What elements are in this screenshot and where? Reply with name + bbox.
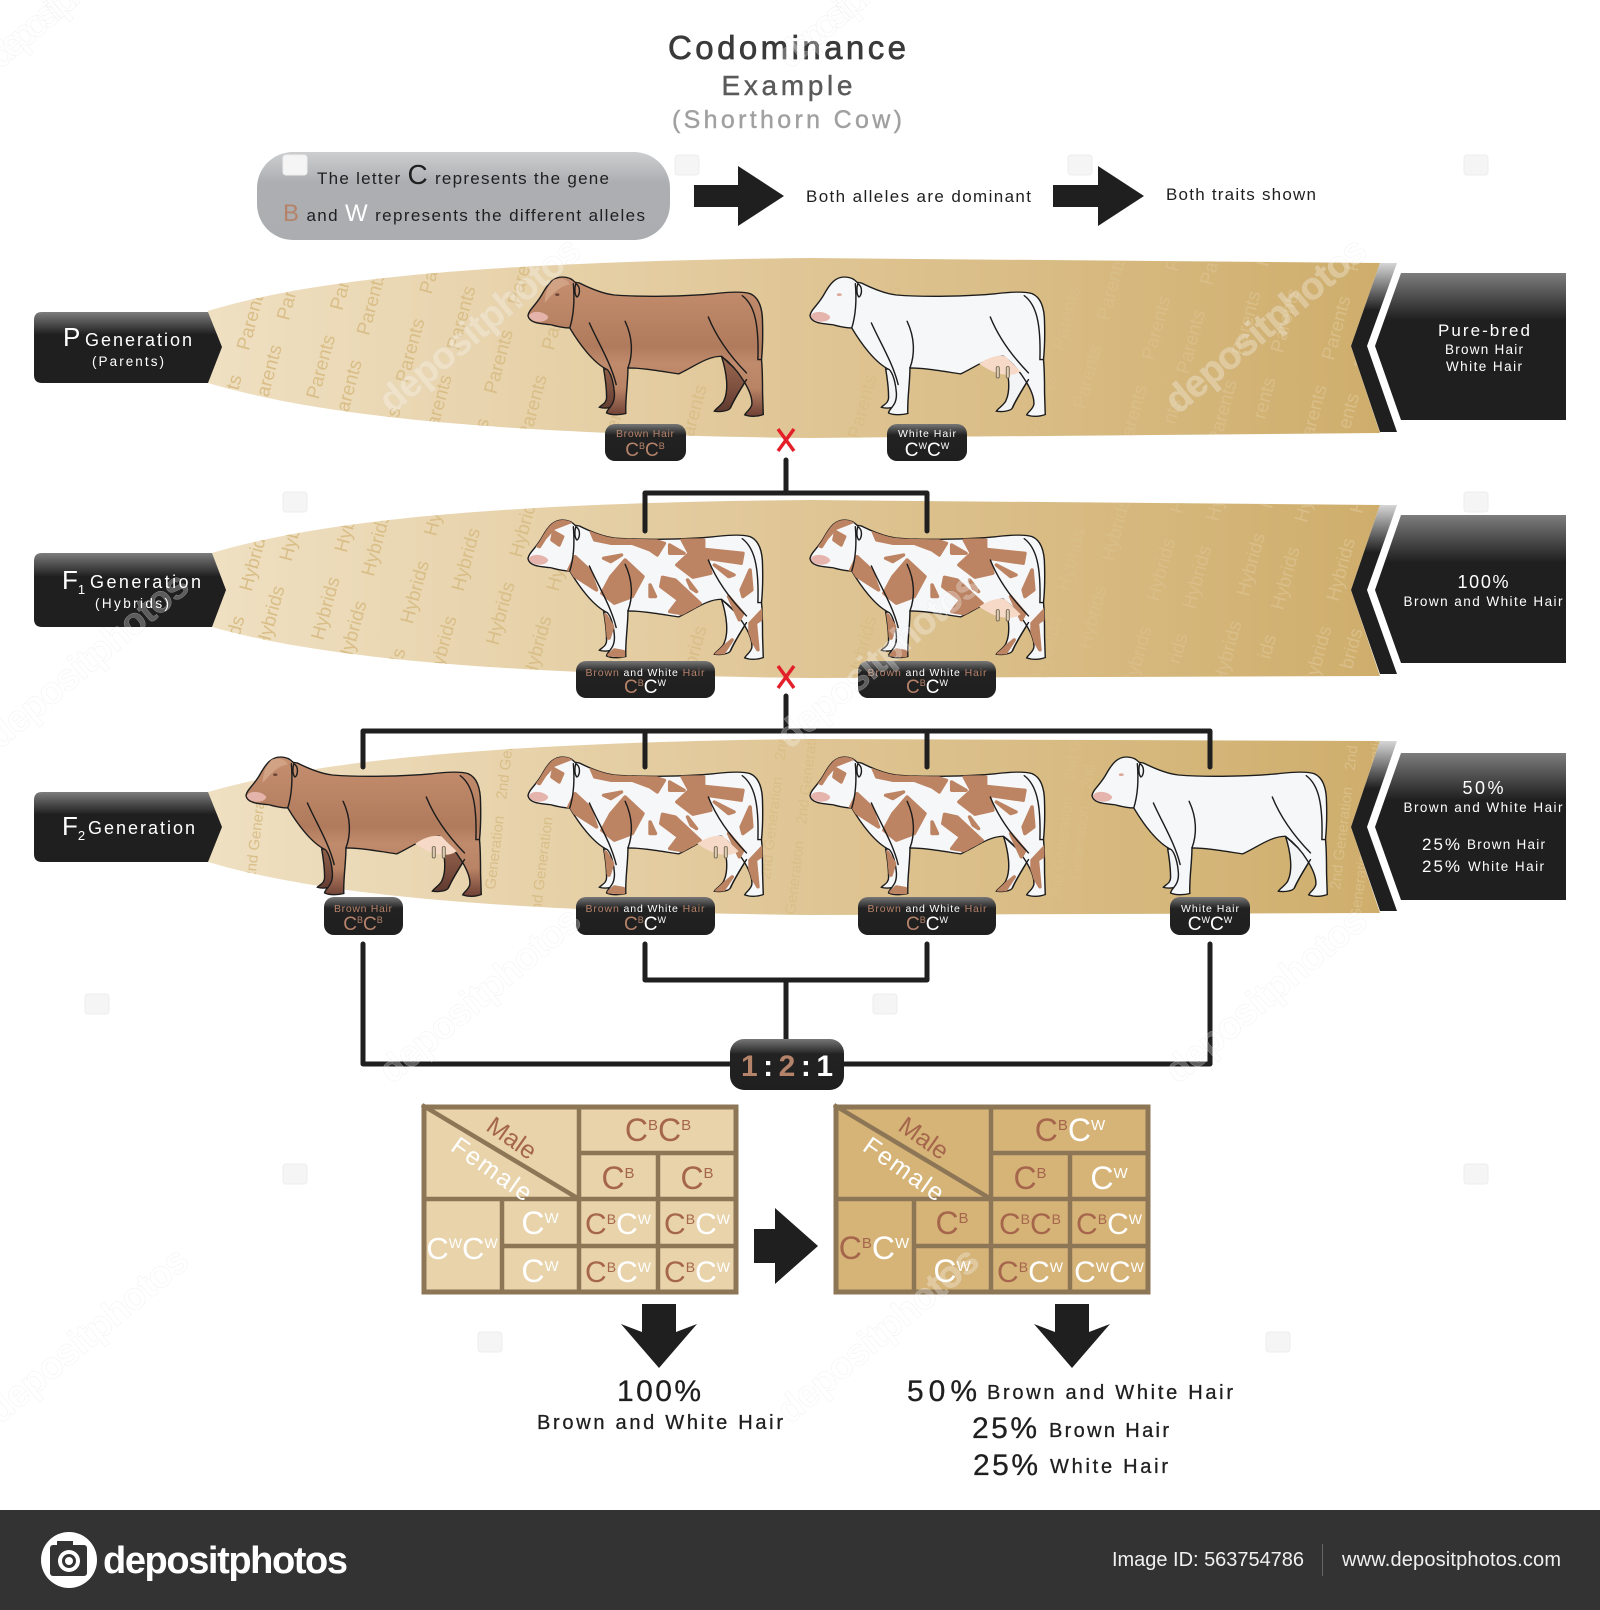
punnett square: F1 cross: B bbox=[648, 1117, 658, 1134]
panel: F1 generation band: Hybrids Hybrids Hybrids bbox=[213, 438, 296, 681]
chip: F2 white bbox=[1170, 897, 1250, 935]
panel: F2 generation band: Generation 2nd bbox=[1067, 763, 1098, 880]
punnett square: F2 cross: W bbox=[895, 1235, 910, 1252]
panel: F1 generation band: brids Hybrids Hybrids bbox=[1337, 451, 1414, 671]
title bbox=[668, 29, 906, 134]
punnett square: F1 cross: C bbox=[585, 1208, 607, 1241]
chip: P brown hair: B bbox=[659, 441, 665, 451]
result: F1 cross bbox=[537, 1375, 783, 1434]
label: F1 generation: (Hybrids) bbox=[95, 596, 169, 611]
label: P generation: Generation bbox=[85, 330, 192, 350]
footer bar: www.depositphotos.com bbox=[1341, 1549, 1561, 1571]
punnett square: F2 cross: C bbox=[1090, 1160, 1113, 1196]
cow: P brown bbox=[528, 277, 763, 416]
chip: P brown hair: C bbox=[625, 440, 639, 461]
panel: P generation band: Parents Parents bbox=[845, 284, 906, 441]
punnett square: F2 cross: C bbox=[1109, 1256, 1131, 1289]
panel: F2 generation band: Generation 2nd Generation bbox=[482, 696, 523, 890]
watermarks: depositphotos bbox=[1157, 229, 1375, 422]
title: Example bbox=[722, 70, 852, 101]
punnett square: F2 cross: B bbox=[862, 1235, 872, 1252]
panel: P generation band: rents Parents Parents bbox=[1250, 198, 1328, 421]
watermarks: depositphotos bbox=[1157, 899, 1375, 1092]
panel: F2 generation band bbox=[208, 739, 1380, 915]
label: F2 generation bbox=[34, 792, 222, 862]
punnett square: F1 cross: W bbox=[449, 1235, 463, 1251]
label: F1 generation bbox=[34, 553, 226, 627]
panel: P generation band: ents Parents Parents bbox=[465, 239, 542, 456]
punnett square: F2 cross: W bbox=[1131, 1259, 1145, 1275]
footer bar: Image ID: 563754786 bbox=[1112, 1549, 1304, 1571]
punnett square: F2 cross: B bbox=[1019, 1259, 1028, 1275]
result: F1 cross: 100% bbox=[617, 1375, 701, 1408]
chip: F2 hybrid left: C bbox=[624, 914, 638, 935]
punnett square: F2 cross: W bbox=[1096, 1259, 1110, 1275]
title: (Shorthorn Cow) bbox=[672, 106, 902, 134]
punnett square: F2 cross: C bbox=[1076, 1208, 1098, 1241]
chevron: F1 bbox=[1351, 505, 1397, 674]
punnett square: F2 cross: C bbox=[997, 1256, 1019, 1289]
punnett square: F1 cross: W bbox=[544, 1258, 559, 1275]
punnett square: F2 cross: C bbox=[999, 1208, 1021, 1241]
chevron: P bbox=[1351, 263, 1397, 432]
chip: P white hair: W bbox=[918, 441, 928, 451]
cow: F2 white bbox=[1092, 757, 1327, 896]
label: F2 generation: Generation bbox=[88, 818, 195, 838]
punnett square: F1 cross: C bbox=[601, 1160, 625, 1196]
punnett square: F2 cross: B bbox=[959, 1210, 969, 1227]
cross: P bbox=[778, 429, 794, 451]
punnett square: F2 cross: W bbox=[1129, 1211, 1143, 1227]
panel: F1 generation band: Hybrids Hybrids Hybrids bbox=[253, 408, 336, 651]
panel: F1 generation band: Hybrids Hybrids Hybrids bbox=[520, 438, 603, 681]
punnett square: F2 cross: B bbox=[1058, 1117, 1068, 1134]
panel: F2 generation band: 2nd Generation 2nd bbox=[527, 774, 562, 920]
punnett square: F2 cross: C bbox=[872, 1230, 895, 1266]
punnett square: F1 cross: C bbox=[695, 1208, 717, 1241]
punnett square: F2 cross bbox=[834, 1105, 1150, 1294]
result: F2 cross bbox=[907, 1375, 1233, 1482]
panel: P generation band: ents Parents Parents bbox=[1335, 214, 1412, 431]
punnett square: F1 cross: W bbox=[638, 1211, 652, 1227]
chip: P white hair: W bbox=[941, 441, 950, 451]
chip: F2 hybrid left bbox=[576, 897, 715, 935]
chip: F2 brown bbox=[324, 897, 403, 935]
panel: P generation band: nts Parents Parents bbox=[1160, 219, 1234, 426]
chip: F2 white: W bbox=[1224, 915, 1233, 925]
punnett square: F2 cross: W bbox=[1113, 1165, 1128, 1182]
punnett square: F1 cross: W bbox=[484, 1235, 498, 1251]
panel: F1 generation band: Hybrids Hybrids bbox=[845, 526, 905, 681]
chevron: F2 bbox=[1351, 741, 1397, 911]
pill: gene and allele key bbox=[257, 152, 670, 240]
label: F2 generation: F bbox=[62, 811, 78, 841]
punnett square: F2 cross: C bbox=[933, 1253, 956, 1289]
panel: F2 generation band: 2nd Generation 2nd Generation bbox=[1047, 677, 1091, 900]
chip: F2 hybrid right: C bbox=[906, 914, 920, 935]
chip: F1 right: B bbox=[920, 678, 926, 688]
punnett square: F1 cross bbox=[422, 1105, 738, 1294]
chip: P brown hair bbox=[605, 424, 686, 461]
chip: P brown hair: B bbox=[639, 441, 645, 451]
arrow: to both traits shown bbox=[1053, 166, 1144, 226]
watermarks: depositphotos bbox=[769, 1239, 987, 1432]
punnett square: F2 cross: W bbox=[956, 1258, 971, 1275]
chip: F1 right: C bbox=[926, 677, 939, 698]
punnett square: F2 cross: B bbox=[1021, 1211, 1030, 1227]
panel: P generation band: Parents Parents Parents bbox=[330, 180, 414, 426]
punnett square: F2 cross: W bbox=[1091, 1117, 1106, 1134]
chip: P brown hair: C bbox=[645, 440, 659, 461]
label: F1 generation: F bbox=[62, 565, 78, 595]
title: Codominance bbox=[668, 29, 906, 66]
punnett square: F1 cross: B bbox=[681, 1117, 691, 1134]
panel: F2 result: 25% bbox=[1422, 857, 1460, 876]
punnett square: F2 cross: C bbox=[1013, 1160, 1037, 1196]
punnett square: F2 cross: C bbox=[1068, 1112, 1091, 1148]
panel: F2 generation band: Generation 2nd Generation bbox=[782, 721, 823, 915]
punnett square: F1 cross: C bbox=[664, 1256, 686, 1289]
arrow: down right bbox=[1034, 1304, 1110, 1368]
label: F1 generation: 1 bbox=[78, 582, 85, 597]
panel: pure-bred result bbox=[1375, 273, 1566, 420]
result: F2 cross: White Hair bbox=[1050, 1456, 1168, 1478]
panel: F1 generation band: Hybrids Hybrids Hybrids bbox=[1120, 448, 1203, 691]
panel: F1 generation band: Hybrids Hybrids bbox=[675, 536, 735, 691]
cow: P white bbox=[810, 277, 1045, 416]
chip: F2 hybrid left: C bbox=[644, 914, 657, 935]
watermarks: depositphotos bbox=[371, 899, 589, 1092]
panel: F1 generation band: Hybrids Hybrids Hybrids bbox=[1210, 443, 1293, 686]
panel: P generation band: Parents Parents Parents bbox=[210, 195, 294, 441]
punnett square: F1 cross: C bbox=[695, 1256, 717, 1289]
chip: F2 hybrid right: C bbox=[926, 914, 939, 935]
chip: P white hair: White Hair bbox=[898, 428, 956, 440]
watermarks: depositphotos bbox=[769, 564, 987, 757]
chip: F1 right bbox=[858, 661, 996, 698]
footer bar: depositphotos bbox=[103, 1540, 348, 1582]
punnett square: F1 cross: Male bbox=[481, 1111, 542, 1165]
panel: F1 generation band bbox=[212, 500, 1380, 678]
icon: depositphotos camera bbox=[41, 1532, 97, 1588]
result: F2 cross: Brown and White Hair bbox=[987, 1382, 1233, 1404]
cow: F1 left bbox=[528, 520, 763, 659]
ratio badge: 1 : 2 : 1 bbox=[741, 1050, 833, 1083]
connectors: F1 to F2 bbox=[363, 696, 1210, 767]
punnett square: F1 cross: C bbox=[462, 1231, 484, 1266]
cow: F2 spotted left bbox=[528, 757, 763, 896]
panel: F2 generation band: 2nd Generation 2nd Generation bbox=[242, 657, 286, 880]
label: F1 generation: Generation bbox=[90, 572, 201, 592]
panel: F2 generation band: Generation 2nd Generation bbox=[1347, 726, 1388, 920]
watermarks bbox=[0, 0, 1375, 1432]
punnett square: F2 cross: C bbox=[839, 1230, 862, 1266]
punnett square: F2 cross: C bbox=[1074, 1256, 1096, 1289]
label: P generation: (Parents) bbox=[92, 354, 164, 369]
punnett square: F2 cross: C bbox=[1028, 1256, 1050, 1289]
punnett square: F1 cross: B bbox=[704, 1165, 714, 1182]
panel: F1 result: Brown and White Hair bbox=[1404, 594, 1563, 609]
chip: F2 white: White Hair bbox=[1181, 903, 1240, 915]
chip: F2 brown: B bbox=[357, 915, 363, 925]
result: F2 cross: 25% bbox=[973, 1449, 1038, 1482]
panel: P generation band: rents Parents Parents bbox=[375, 228, 453, 451]
panel: pure-bred result: Brown Hair bbox=[1445, 342, 1524, 357]
panel: P generation band: Parents Parents Parents bbox=[1295, 205, 1379, 451]
result: F2 cross: Brown Hair bbox=[1049, 1420, 1169, 1442]
panel: F2 result: Brown and White Hair bbox=[1404, 800, 1563, 815]
punnett square: F1 cross: B bbox=[625, 1165, 635, 1182]
chip: F2 white: W bbox=[1202, 915, 1210, 925]
panel: F2 result: White Hair bbox=[1468, 859, 1544, 874]
punnett square: F1 cross: B bbox=[686, 1211, 695, 1227]
result: F1 cross: Brown and White Hair bbox=[537, 1412, 783, 1434]
chip: F2 white: C bbox=[1188, 914, 1202, 935]
chip: F1 right: W bbox=[939, 678, 948, 688]
punnett square: F2 cross: C bbox=[935, 1205, 959, 1241]
chip: F1 left: C bbox=[644, 677, 657, 698]
chip: F2 brown: C bbox=[363, 914, 377, 935]
panel: F1 generation band: Hybrids Hybrids Hybrids bbox=[1300, 448, 1383, 691]
panel: P generation band: Parents Parents bbox=[675, 294, 736, 451]
punnett square: F1 cross: Female bbox=[446, 1132, 537, 1207]
camera watermarks bbox=[85, 155, 1488, 1352]
panel: F2 generation band: 2nd Generation 2nd bbox=[1327, 744, 1362, 890]
panel: P generation band: Parents Parents bbox=[595, 304, 656, 461]
punnett square: F1 cross: C bbox=[521, 1253, 544, 1289]
punnett square: F1 cross: W bbox=[638, 1259, 652, 1275]
arrow: between squares bbox=[754, 1208, 818, 1284]
connectors: P to F1 bbox=[645, 460, 927, 531]
chip: P brown hair: Brown Hair bbox=[616, 428, 674, 440]
punnett square: F2 cross: W bbox=[1050, 1259, 1064, 1275]
punnett square: F1 cross: W bbox=[717, 1259, 731, 1275]
panel: P generation band: nts Parents Parents bbox=[290, 244, 364, 451]
pill: gene and allele key: The letter C represents the gene bbox=[317, 159, 609, 190]
punnett square: F1 cross: C bbox=[625, 1112, 648, 1148]
chip: P white hair: C bbox=[927, 440, 941, 461]
panel: P generation band: Parents Parents Parents bbox=[515, 195, 599, 441]
chip: F1 left: B bbox=[638, 678, 644, 688]
text: both alleles dominant: Both alleles are dominant bbox=[806, 187, 1031, 206]
chip: P white hair: C bbox=[905, 440, 918, 461]
punnett square: F2 cross: B bbox=[1098, 1211, 1107, 1227]
panel: F1 generation band: Hybrids Hybrids bbox=[595, 546, 655, 701]
punnett square: F1 cross: C bbox=[664, 1208, 686, 1241]
chip: F1 right: C bbox=[906, 677, 920, 698]
arrow: to both alleles dominant bbox=[694, 166, 784, 226]
panel: P generation band: Parents Parents Parents bbox=[420, 195, 504, 441]
chip: F2 hybrid left: Brown and White Hair bbox=[586, 903, 705, 915]
punnett square: F1 cross: C bbox=[426, 1231, 449, 1266]
chip: F1 left: Brown and White Hair bbox=[586, 667, 705, 679]
punnett square: F1 cross: B bbox=[607, 1211, 616, 1227]
watermarks: depositphotos bbox=[371, 229, 589, 422]
label: P generation: P bbox=[63, 322, 80, 352]
chip: F2 hybrid right: W bbox=[939, 915, 948, 925]
punnett square: F1 cross: C bbox=[585, 1256, 607, 1289]
arrow: down left bbox=[621, 1304, 697, 1368]
chip: F2 white: C bbox=[1210, 914, 1224, 935]
punnett square: F2 cross: C bbox=[1107, 1208, 1129, 1241]
cow: F1 right bbox=[810, 520, 1045, 659]
chip: F2 hybrid right bbox=[858, 897, 996, 935]
punnett square: F1 cross: C bbox=[616, 1208, 638, 1241]
panel: F2 result bbox=[1375, 753, 1566, 900]
result: F2 cross: 25% bbox=[972, 1412, 1037, 1445]
panel: F1 generation band: rids Hybrids Hybrids bbox=[1165, 456, 1240, 666]
panel: F1 result: 100% bbox=[1458, 572, 1508, 592]
panel: F1 generation band: ids Hybrids Hybrids bbox=[470, 492, 543, 696]
chip: F2 brown: Brown Hair bbox=[334, 903, 392, 915]
punnett square: F2 cross: Male bbox=[893, 1111, 954, 1165]
panel: F1 generation band: Hybrids Hybrids Hybrids bbox=[1075, 408, 1158, 651]
panel: F1 generation band: Hybrids Hybrids Hybrids bbox=[335, 423, 418, 666]
panel: P generation band: Parents Parents Parents bbox=[1070, 165, 1154, 411]
connectors: F2 to ratio bbox=[363, 944, 1210, 1064]
punnett square: F2 cross: B bbox=[1037, 1165, 1047, 1182]
punnett square: F1 cross: B bbox=[686, 1259, 695, 1275]
panel: pure-bred result: White Hair bbox=[1446, 359, 1522, 374]
punnett square: F2 cross: Female bbox=[858, 1132, 949, 1207]
cow: F2 spotted right bbox=[810, 757, 1045, 896]
label: F2 generation: 2 bbox=[78, 828, 85, 843]
chip: F1 left bbox=[576, 661, 715, 698]
punnett square: F2 cross: C bbox=[1030, 1208, 1052, 1241]
panel: F1 generation band: Hybrids Hybrids Hybrids bbox=[425, 438, 508, 681]
pill: gene and allele key: B and W represents the different alleles bbox=[283, 200, 645, 227]
chip: F2 brown: C bbox=[343, 914, 357, 935]
footer bar bbox=[0, 1510, 1600, 1610]
cross: F1 bbox=[778, 666, 794, 688]
panel: F2 result: Brown Hair bbox=[1467, 837, 1546, 852]
label: P generation bbox=[34, 312, 222, 383]
punnett square: F1 cross: W bbox=[717, 1211, 731, 1227]
punnett square: F2 cross: C bbox=[1035, 1112, 1058, 1148]
ratio badge bbox=[730, 1039, 844, 1090]
punnett square: F1 cross: C bbox=[521, 1205, 544, 1241]
chip: F1 left: W bbox=[657, 678, 666, 688]
chip: P white hair bbox=[887, 424, 967, 461]
panel: F1 generation band: brids Hybrids Hybrids bbox=[380, 471, 457, 691]
text: both traits shown: Both traits shown bbox=[1166, 185, 1316, 204]
chip: F2 hybrid left: W bbox=[657, 915, 666, 925]
result: F2 cross: 50% bbox=[907, 1375, 977, 1408]
punnett square: F1 cross: W bbox=[544, 1210, 559, 1227]
punnett square: F1 cross: B bbox=[607, 1259, 616, 1275]
panel: P generation band: Parents Parents Parents bbox=[250, 165, 334, 411]
panel: P generation band bbox=[208, 258, 1380, 438]
chip: F2 hybrid left: B bbox=[638, 915, 644, 925]
panel: F1 generation band: Hybrids Hybrids Hybrids bbox=[1030, 438, 1113, 681]
panel: F2 generation band: 2nd Generation 2nd Generation bbox=[757, 657, 801, 880]
panel: F2 result: 50% bbox=[1462, 778, 1504, 798]
panel: F1 generation band: ids Hybrids Hybrids bbox=[1255, 457, 1328, 661]
chip: F1 right: Brown and White Hair bbox=[868, 667, 987, 679]
chip: F2 hybrid right: B bbox=[920, 915, 926, 925]
chip: F2 brown: B bbox=[377, 915, 383, 925]
cow: F2 brown bbox=[246, 757, 481, 896]
panel: F1 result bbox=[1375, 515, 1566, 663]
panel: F1 generation band: ids Hybrids Hybrids bbox=[295, 487, 368, 691]
punnett square: F1 cross: C bbox=[658, 1112, 681, 1148]
panel: F2 result: 25% bbox=[1422, 835, 1460, 854]
panel: P generation band: Parents Parents Parents bbox=[1025, 195, 1109, 441]
punnett square: F2 cross: B bbox=[1052, 1211, 1061, 1227]
punnett square: F1 cross: C bbox=[616, 1256, 638, 1289]
panel: pure-bred result: Pure-bred bbox=[1438, 321, 1530, 340]
punnett square: F1 cross: C bbox=[680, 1160, 704, 1196]
panel: P generation band: Parents Parents Parents bbox=[1205, 200, 1289, 446]
chip: F2 hybrid right: Brown and White Hair bbox=[868, 903, 987, 915]
panel: P generation band: Parents Parents Parents bbox=[1115, 205, 1199, 451]
chip: F1 left: C bbox=[624, 677, 638, 698]
